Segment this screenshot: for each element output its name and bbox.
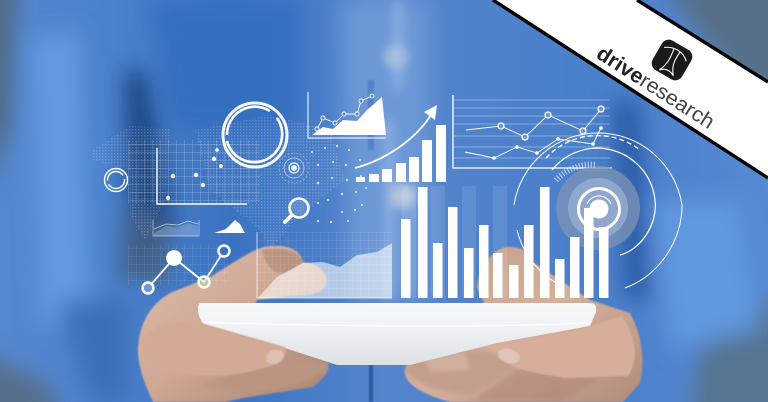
left hand with fingers [138, 246, 328, 402]
tablet [198, 303, 596, 365]
large white bar chart [401, 187, 608, 298]
mini line area chart [153, 220, 199, 236]
left thumb [140, 322, 286, 376]
overlay: world map and grid [92, 115, 392, 298]
scatter chart [157, 148, 247, 204]
top mountain chart [308, 92, 386, 138]
magnifier icon [285, 198, 308, 222]
brand wordmark: driveresearch [592, 42, 719, 134]
small ring icon [104, 168, 128, 192]
faint background bars [402, 186, 507, 298]
target icon [279, 153, 309, 183]
bottom area chart [257, 232, 392, 298]
right thumb [497, 316, 635, 378]
large ring gauge [223, 103, 287, 167]
network globe dots [311, 145, 367, 223]
right hand with fingers [405, 247, 642, 402]
diagonal brand ribbon [493, 0, 768, 178]
mini mountain chart [214, 220, 245, 233]
logo icon [649, 37, 695, 83]
radial gauge [514, 133, 682, 288]
upper-right multi-line chart [453, 95, 612, 168]
growth arrow bar chart [355, 105, 446, 182]
line chart with nodes [142, 246, 230, 294]
